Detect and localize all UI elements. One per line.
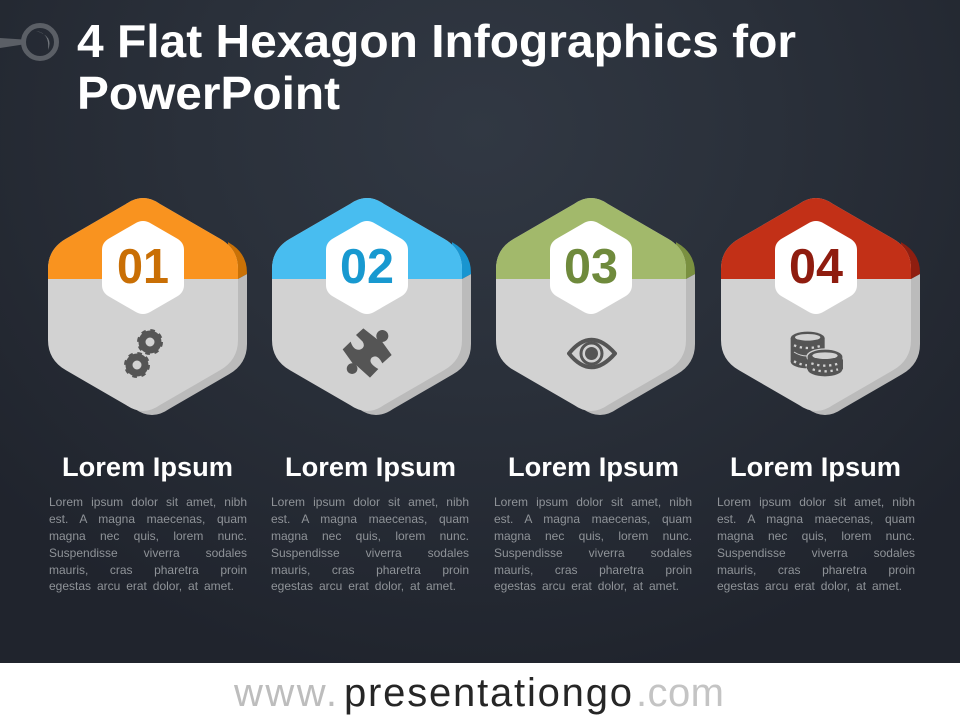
body text: magna nec quis, lorem nunc. <box>271 529 469 543</box>
heading: Lorem Ipsum <box>285 452 456 482</box>
hexagon badge 04: 04 <box>789 240 843 294</box>
panel: step 04 <box>717 198 920 593</box>
title: PowerPoint <box>77 67 340 119</box>
panel: step 03 <box>494 198 695 593</box>
footer: website banner: www. <box>233 671 337 715</box>
body text <box>49 495 247 593</box>
body text: Suspendisse viverra sodales <box>494 546 692 560</box>
footer: website banner: .com <box>636 671 724 715</box>
body text <box>494 495 692 593</box>
heading: Lorem Ipsum <box>508 452 679 482</box>
icon: puzzle piece <box>343 328 392 378</box>
body text: magna nec quis, lorem nunc. <box>494 529 692 543</box>
body text: egestas arcu erat dolor, at amet. <box>494 579 679 593</box>
hexagon badge 03: 03 <box>564 240 618 294</box>
heading: Lorem Ipsum <box>62 452 233 482</box>
body text: Lorem ipsum dolor sit amet, nibh <box>49 495 247 509</box>
panel: step 01 <box>48 198 247 593</box>
footer: website banner: presentationgo <box>344 671 632 715</box>
heading: Lorem Ipsum <box>730 452 901 482</box>
body text: Suspendisse viverra sodales <box>49 546 247 560</box>
body text: magna nec quis, lorem nunc. <box>49 529 247 543</box>
body text: Suspendisse viverra sodales <box>717 546 915 560</box>
body text: est. A magna maecenas, quam <box>717 512 915 526</box>
body text: Suspendisse viverra sodales <box>271 546 469 560</box>
body text: mauris, cras pharetra proin <box>271 563 469 577</box>
body text: Lorem ipsum dolor sit amet, nibh <box>271 495 469 509</box>
hexagon badge 04 <box>721 198 920 415</box>
title <box>77 15 796 119</box>
body text: est. A magna maecenas, quam <box>494 512 692 526</box>
title: 4 Flat Hexagon Infographics for <box>77 15 796 67</box>
body text <box>271 495 469 593</box>
hexagon badge 02 <box>272 198 471 415</box>
body text: est. A magna maecenas, quam <box>49 512 247 526</box>
body text: Lorem ipsum dolor sit amet, nibh <box>494 495 692 509</box>
icon: gears <box>126 330 162 376</box>
body text: est. A magna maecenas, quam <box>271 512 469 526</box>
logo: magnifier ring <box>0 23 59 61</box>
icon: eye <box>569 340 615 367</box>
body text: mauris, cras pharetra proin <box>717 563 915 577</box>
body text: mauris, cras pharetra proin <box>49 563 247 577</box>
hexagon badge 01: 01 <box>117 240 169 294</box>
body text: egestas arcu erat dolor, at amet. <box>717 579 902 593</box>
body text: Lorem ipsum dolor sit amet, nibh <box>717 495 915 509</box>
body text: egestas arcu erat dolor, at amet. <box>271 579 456 593</box>
hexagon badge 03 <box>496 198 695 415</box>
body text: magna nec quis, lorem nunc. <box>717 529 915 543</box>
body text <box>717 495 915 593</box>
hexagon badge 01 <box>48 198 247 415</box>
body text: mauris, cras pharetra proin <box>494 563 692 577</box>
icon: coins <box>791 332 843 377</box>
hexagon badge 02: 02 <box>340 240 394 294</box>
panel: step 02 <box>271 198 471 593</box>
body text: egestas arcu erat dolor, at amet. <box>49 579 234 593</box>
